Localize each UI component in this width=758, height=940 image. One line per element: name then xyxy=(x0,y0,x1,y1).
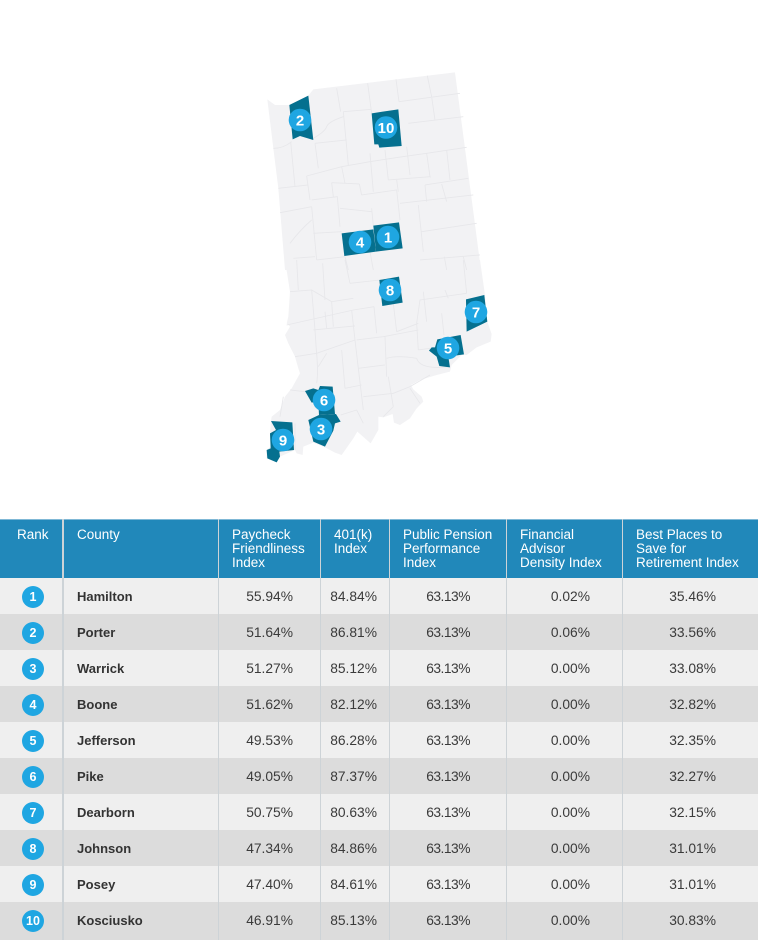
row 7: 50.75% xyxy=(246,805,293,820)
row 5: 49.53% xyxy=(246,733,293,748)
table header: Public Pension xyxy=(403,527,492,542)
county: Porter xyxy=(289,96,313,140)
county borders north xyxy=(273,76,480,270)
row 1: 84.84% xyxy=(330,589,377,604)
row 6: Pike xyxy=(77,769,104,784)
row 9: 31.01% xyxy=(669,877,716,892)
county: Hamilton xyxy=(373,222,403,252)
map: Indiana counties xyxy=(266,72,492,462)
row 6: 49.05% xyxy=(246,769,293,784)
row 5: 86.28% xyxy=(330,733,377,748)
table header: Retirement Index xyxy=(636,555,739,570)
row 2: 86.81% xyxy=(330,625,377,640)
table header: 401(k) xyxy=(334,527,372,542)
marker 2 xyxy=(289,109,311,131)
row 7 xyxy=(0,794,758,830)
row 10: 30.83% xyxy=(669,913,716,928)
row 6: 32.27% xyxy=(669,769,716,784)
row 10: 85.13% xyxy=(330,913,377,928)
row 4: 4 xyxy=(30,698,36,712)
table header: Index xyxy=(403,555,436,570)
row 2 xyxy=(0,614,758,650)
row 9: 84.61% xyxy=(330,877,377,892)
table header: Advisor xyxy=(520,541,565,556)
marker 1: 1 xyxy=(384,230,392,246)
row 2: 63.13% xyxy=(426,625,470,640)
row 5: 5 xyxy=(30,734,36,748)
row 3 xyxy=(0,650,758,686)
row 1: 35.46% xyxy=(669,589,716,604)
row 7: 7 xyxy=(30,806,36,820)
row 1: 0.02% xyxy=(551,589,590,604)
row 2: 33.56% xyxy=(669,625,716,640)
row 9: 0.00% xyxy=(551,877,590,892)
row 6: 0.00% xyxy=(551,769,590,784)
table header: County xyxy=(77,527,120,542)
marker 6: 6 xyxy=(320,392,328,410)
row 10: 63.13% xyxy=(426,913,470,928)
row 7: 63.13% xyxy=(426,805,470,820)
row 9: Posey xyxy=(77,877,115,892)
row 7: 32.15% xyxy=(669,805,716,820)
row 6: 6 xyxy=(30,770,36,784)
row 6: 87.37% xyxy=(330,769,377,784)
marker 9 xyxy=(272,429,294,451)
row 8: Johnson xyxy=(77,841,131,856)
row 4: 51.62% xyxy=(246,697,293,712)
county: Johnson xyxy=(379,277,403,306)
row 4: 0.00% xyxy=(551,697,590,712)
table header: Index xyxy=(334,541,367,556)
highlighted counties xyxy=(267,96,487,462)
row 8: 31.01% xyxy=(669,841,716,856)
row 4: 32.82% xyxy=(669,697,716,712)
table header: Performance xyxy=(403,541,480,556)
county: Pike xyxy=(305,386,335,415)
table header: Rank xyxy=(17,527,49,542)
row 2: 2 xyxy=(30,626,36,640)
row 3: 63.13% xyxy=(426,661,470,676)
marker 4: 4 xyxy=(356,234,365,252)
row 8: 0.00% xyxy=(551,841,590,856)
table header: Friendliness xyxy=(232,541,305,556)
marker 1 xyxy=(377,226,399,248)
map markers xyxy=(272,109,487,451)
marker 5: 5 xyxy=(444,340,452,358)
row 8 xyxy=(0,830,758,866)
row 2: 51.64% xyxy=(246,625,293,640)
row 1: 63.13% xyxy=(426,589,470,604)
row 7: 80.63% xyxy=(330,805,377,820)
row 3: 33.08% xyxy=(669,661,716,676)
row 8: 63.13% xyxy=(426,841,470,856)
row 10: 46.91% xyxy=(246,913,293,928)
row 5: 0.00% xyxy=(551,733,590,748)
table header: Density Index xyxy=(520,555,602,570)
row 10 xyxy=(0,902,758,940)
county: Jefferson xyxy=(429,335,464,367)
row 1: 1 xyxy=(30,590,36,604)
row 6 xyxy=(0,758,758,794)
marker 8: 8 xyxy=(386,282,394,300)
row 9 xyxy=(0,866,758,902)
marker 9: 9 xyxy=(279,432,287,450)
row 5: 63.13% xyxy=(426,733,470,748)
row 5: 32.35% xyxy=(669,733,716,748)
marker 8 xyxy=(379,279,401,301)
row 7: Dearborn xyxy=(77,805,135,820)
row 8: 47.34% xyxy=(246,841,293,856)
county: Warrick xyxy=(308,414,341,447)
state outline xyxy=(267,72,492,462)
row 5: Jefferson xyxy=(77,733,136,748)
marker 5 xyxy=(437,337,459,359)
row 3: 0.00% xyxy=(551,661,590,676)
marker 6 xyxy=(313,389,335,411)
row 9: 47.40% xyxy=(246,877,293,892)
table header: Paycheck xyxy=(232,527,291,542)
row 4 xyxy=(0,686,758,722)
ranking table xyxy=(0,519,758,940)
table header: Financial xyxy=(520,527,574,542)
row 8: 84.86% xyxy=(330,841,377,856)
marker 3 xyxy=(310,418,332,440)
row 5 xyxy=(0,722,758,758)
county: Kosciusko xyxy=(372,109,402,148)
row 8: 8 xyxy=(30,842,36,856)
row 10: Kosciusko xyxy=(77,913,143,928)
county borders south xyxy=(280,260,467,450)
row 2: 0.06% xyxy=(551,625,590,640)
table header: Best Places to xyxy=(636,527,722,542)
row 6: 63.13% xyxy=(426,769,470,784)
row 10: 0.00% xyxy=(551,913,590,928)
county: Posey xyxy=(267,421,294,462)
marker 7 xyxy=(465,301,487,323)
row 3: 51.27% xyxy=(246,661,293,676)
row 1: 55.94% xyxy=(246,589,293,604)
row 7: 0.00% xyxy=(551,805,590,820)
marker 10 xyxy=(375,116,397,139)
row 3: 3 xyxy=(30,662,36,676)
row 3: 85.12% xyxy=(330,661,377,676)
county: Boone xyxy=(342,229,376,256)
marker 3: 3 xyxy=(317,422,325,438)
row 2: Porter xyxy=(77,625,115,640)
row 1: Hamilton xyxy=(77,589,133,604)
row 4: Boone xyxy=(77,697,117,712)
row 1 xyxy=(0,578,758,614)
row 10: 10 xyxy=(26,914,40,928)
row 3: Warrick xyxy=(77,661,124,676)
marker 7: 7 xyxy=(472,304,480,322)
table header xyxy=(0,519,758,578)
table header: Index xyxy=(232,555,265,570)
row 4: 63.13% xyxy=(426,697,470,712)
marker 10: 10 xyxy=(378,120,394,137)
table header: Save for xyxy=(636,541,686,556)
marker 2: 2 xyxy=(296,112,304,130)
row 9: 9 xyxy=(30,878,36,892)
row 4: 82.12% xyxy=(330,697,377,712)
row 9: 63.13% xyxy=(426,877,470,892)
marker 4 xyxy=(349,231,371,253)
county: Dearborn xyxy=(466,295,487,332)
